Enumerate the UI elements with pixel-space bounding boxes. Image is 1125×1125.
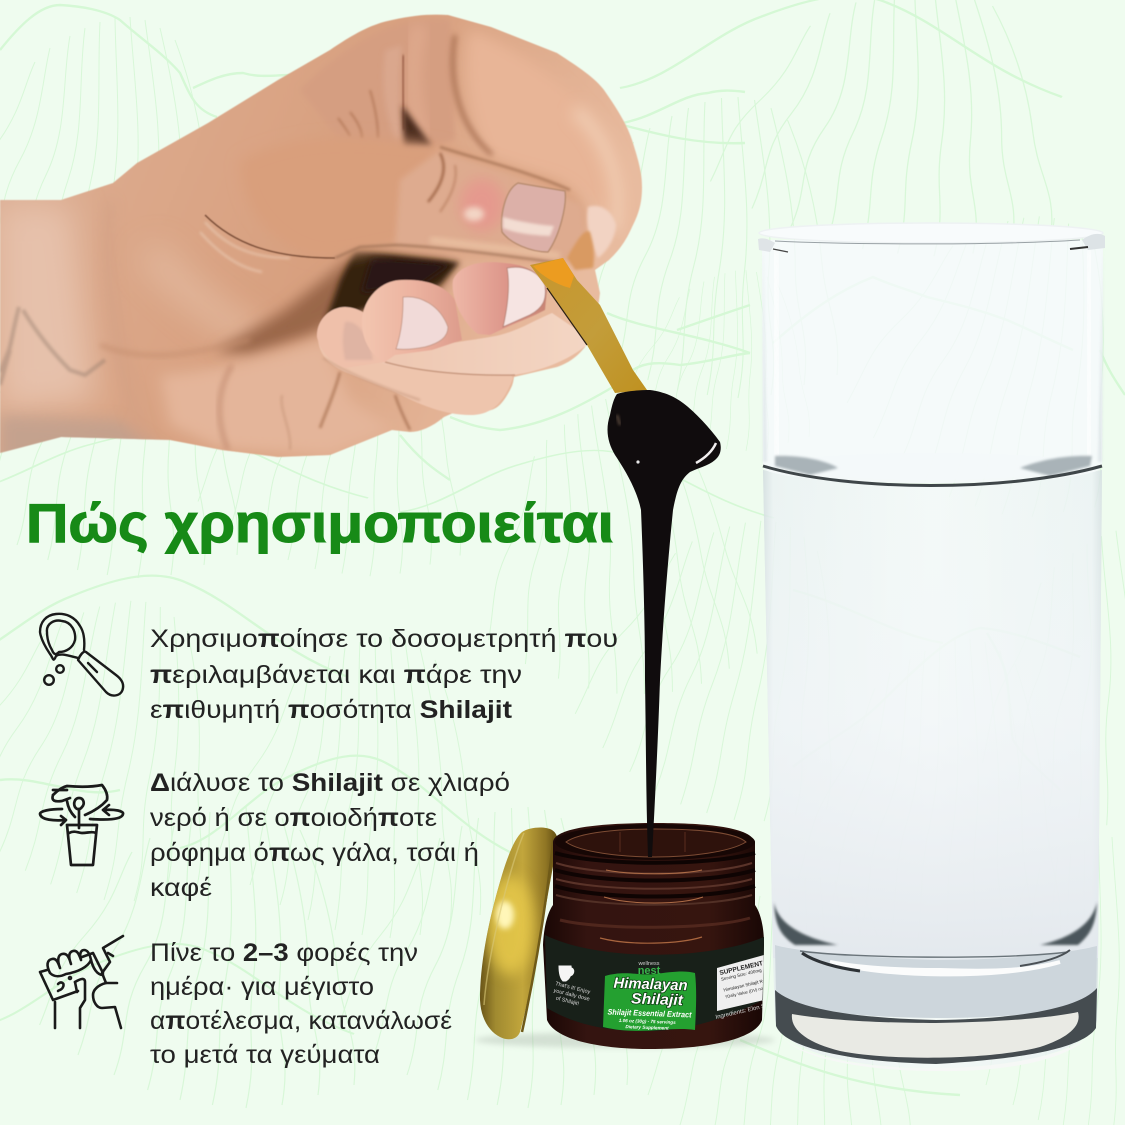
side label text (551, 981, 592, 1009)
step 3 text: Πίνε το 2–3 φορές την (150, 939, 418, 967)
glass rim (758, 223, 1105, 252)
water surface (763, 453, 1102, 486)
veins (0, 307, 105, 385)
jar lid (480, 828, 557, 1039)
index fingertip nail (587, 206, 616, 258)
supplement facts panel: Himalayan Shilajit Resin (723, 977, 772, 993)
side label text: That's it! Enjoy (555, 981, 591, 996)
brand logo: nest (638, 965, 661, 977)
side label text: your daily dose (553, 988, 590, 1003)
upper knuckle fingers (432, 89, 452, 139)
step 3 text: αποτέλεσμα, κατανάλωσέ (150, 1007, 452, 1035)
thumb shading (205, 138, 586, 263)
step 3 text: ημέρα· για μέγιστο (150, 973, 374, 1001)
cup icon (559, 966, 574, 981)
ring finger (362, 280, 462, 362)
supplement facts panel: SUPPLEMENT FACTS (719, 955, 787, 977)
step 2 text: νερό ή σε ο ποιοδήποτε (150, 804, 437, 832)
step 2 text: Διάλυσε το Shilajit σε χλιαρό (150, 769, 510, 797)
lower corners (774, 902, 838, 945)
step 2 text: καφέ (150, 874, 212, 902)
supplement facts panel: †Daily Value (DV) not established (724, 980, 787, 999)
glass base (774, 902, 1097, 1071)
supplement facts panel: Serving Size: 400mg (720, 967, 763, 982)
thumb nail (502, 183, 565, 252)
jar mouth (555, 824, 755, 863)
step 2 text (150, 769, 510, 902)
dark gap behind fingers (215, 252, 452, 355)
spoon handle (530, 258, 647, 393)
brand logo: wellness (637, 961, 660, 967)
palm light (150, 250, 260, 340)
glass upper empty part (762, 240, 1103, 480)
dark arc and foot (775, 988, 1097, 1064)
step 2 icon: dissolve in glass (40, 785, 123, 865)
jar body (543, 823, 764, 1049)
lower palm (160, 340, 392, 455)
step 1 text: Χρησιμο ποίησε το δοσομετρητή που (150, 625, 618, 653)
green product label (603, 971, 696, 1031)
middle finger (453, 262, 547, 335)
supplement facts panel: Ingredients: Elon Shilajit (715, 1001, 779, 1021)
jar shadow (475, 1032, 775, 1048)
supplement facts panel (716, 955, 764, 1019)
step 1 text: επιθυμητή ποσότητα Shilajit (150, 696, 513, 724)
side label text: of Shilajit! (555, 996, 580, 1007)
jar threads (555, 863, 755, 943)
green product label: 1.06 oz (30g) - 75 servings (619, 1018, 676, 1025)
shilajit jar with lid (475, 823, 792, 1049)
glass of water (758, 223, 1105, 1071)
shilajit on spoon and drip (608, 390, 721, 857)
step 1 text: περιλαμβάνεται και πάρε την (150, 661, 522, 689)
step 2 text: ρόφημα ό πως γάλα, τσάι ή (150, 839, 479, 867)
wrist shading (0, 205, 95, 410)
hand holding spoon (0, 15, 721, 857)
step 1 icon: spoon (40, 614, 123, 695)
little finger (317, 307, 385, 368)
green product label: Shilajit (631, 990, 684, 1009)
water body (763, 470, 1102, 1068)
step 3 icon: drinking (40, 936, 123, 1028)
jar label (545, 935, 764, 1031)
green product label: Himalayan (613, 975, 688, 994)
green product label: Shilajit Essential Extract (607, 1008, 692, 1019)
thick base band (775, 945, 1097, 1018)
step 3 text: το μετά τα γεύματα (150, 1041, 380, 1069)
title: Πώς χρησιμοποιείται (26, 492, 614, 554)
step 1 text (150, 625, 618, 724)
step 3 text (150, 939, 452, 1069)
lower finger and ring finger body (318, 313, 592, 415)
green product label: Dietary Supplement (625, 1024, 669, 1031)
